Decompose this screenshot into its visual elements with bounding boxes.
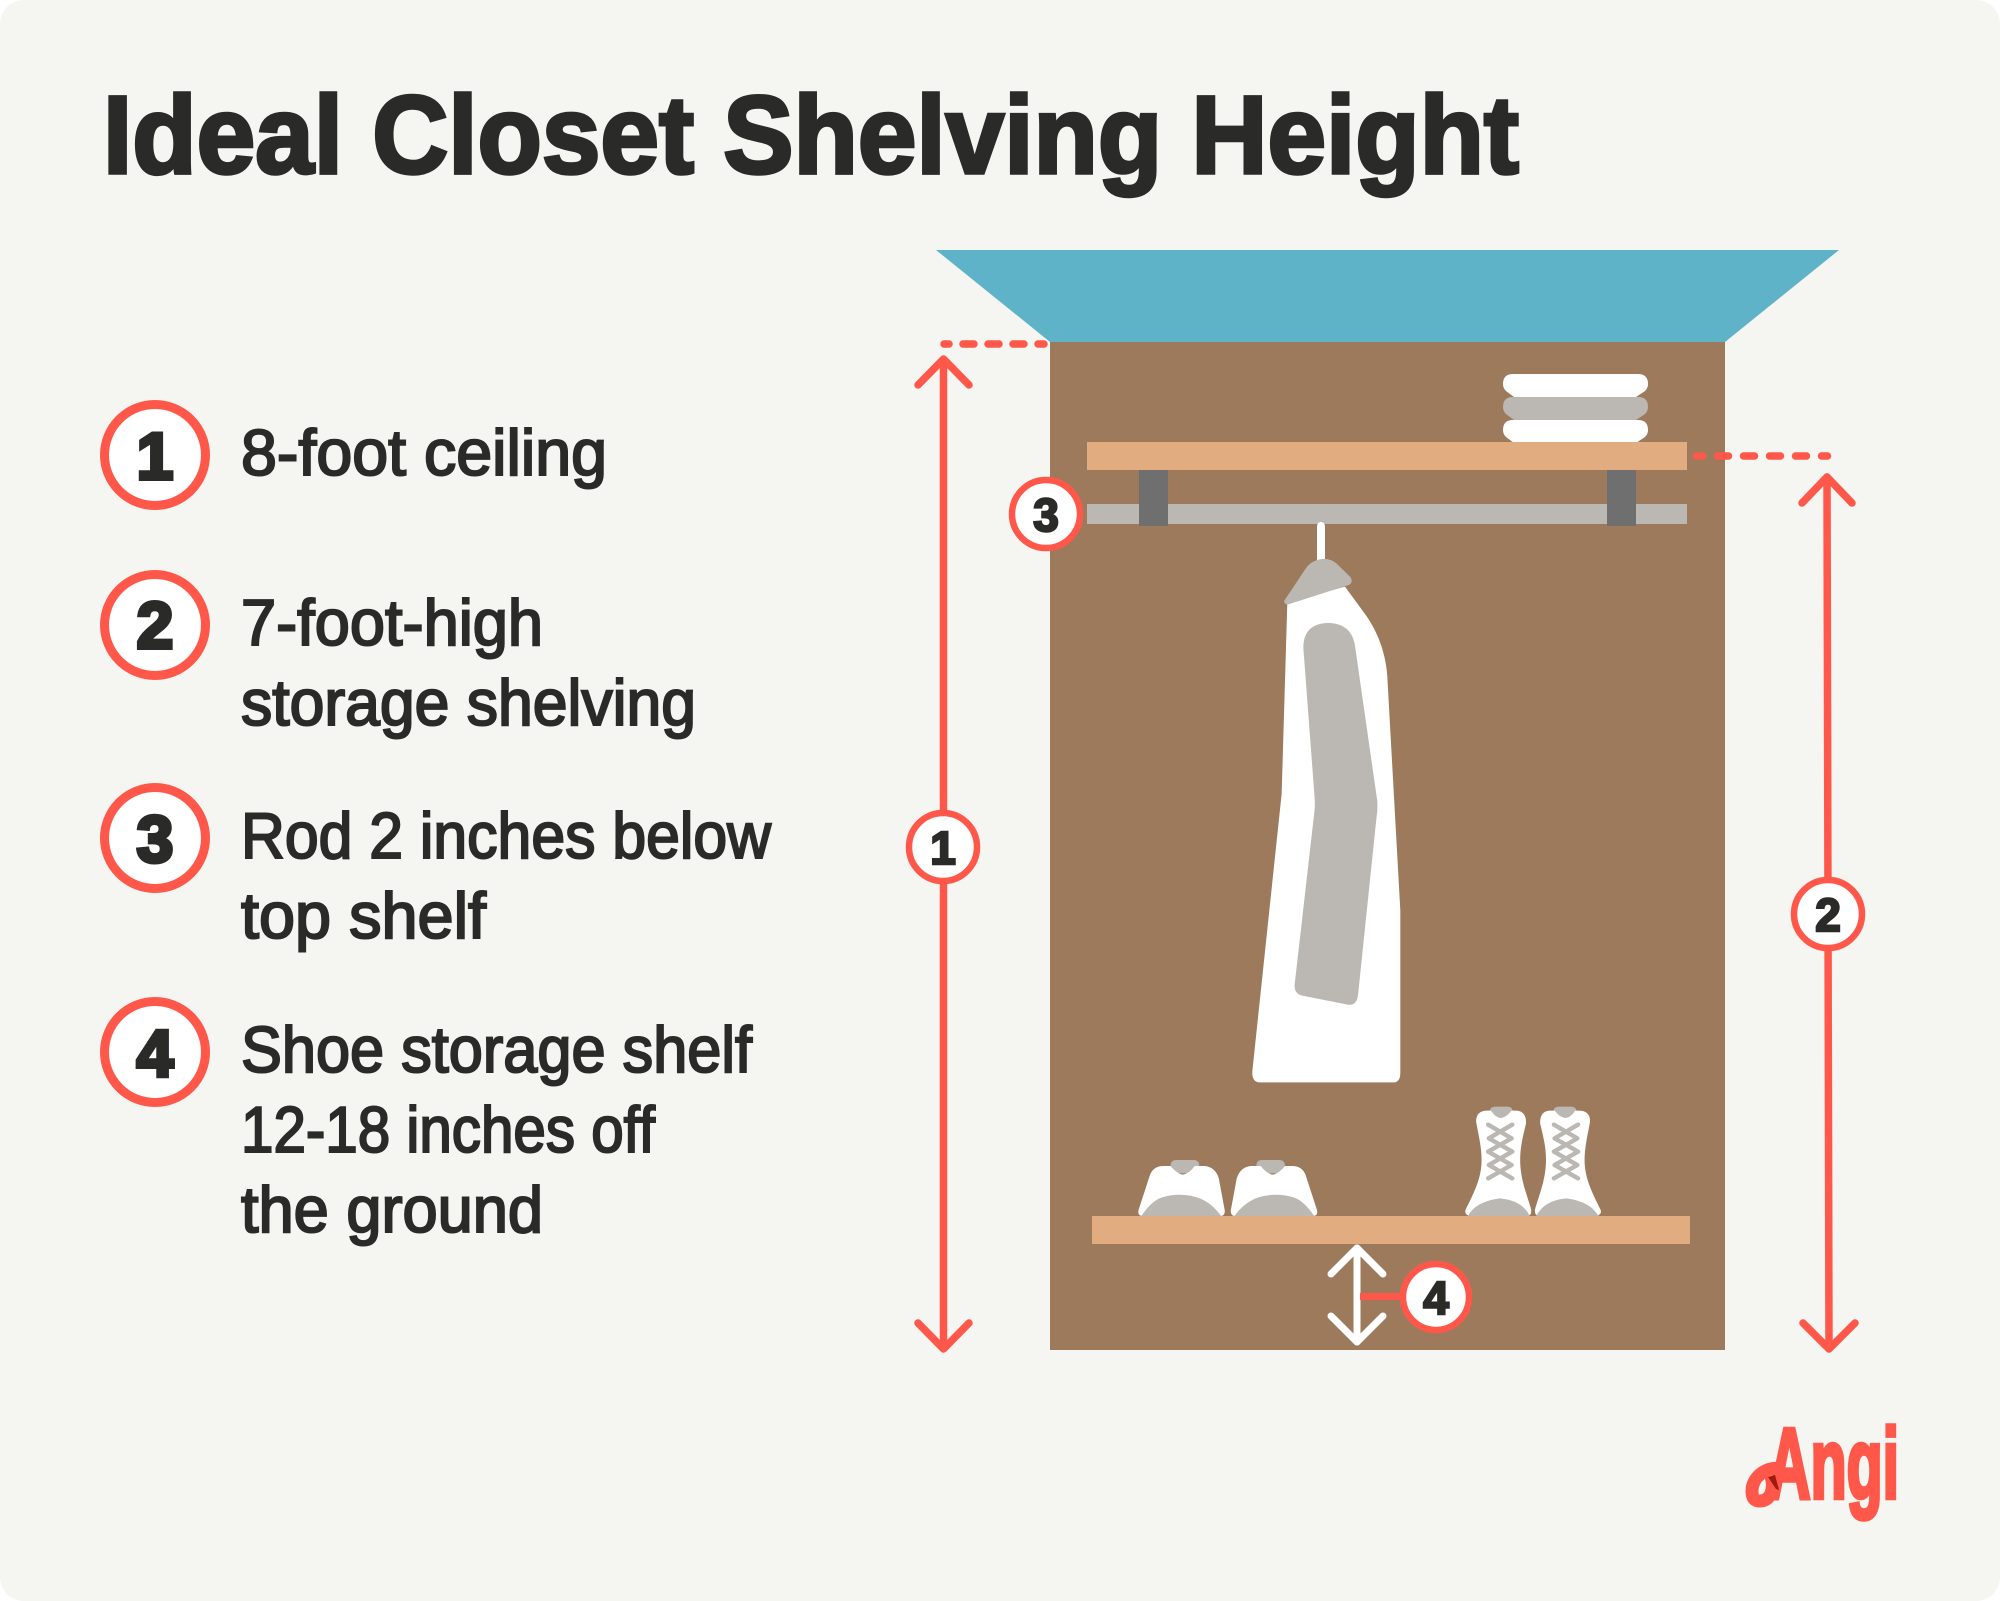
shelf dashed guide — [1696, 452, 1829, 460]
legend item 4: the ground — [241, 1173, 543, 1246]
legend item 3: 3 — [137, 802, 173, 876]
closet back wall — [1050, 342, 1725, 1350]
marker 4 — [1403, 1264, 1469, 1330]
legend list — [104, 404, 772, 1246]
legend item 2: 7-foot-high — [241, 586, 543, 659]
shoe shelf — [1092, 1216, 1690, 1244]
Angi logo: Angi — [1768, 1408, 1899, 1520]
legend item 3: top shelf — [241, 879, 487, 952]
legend item 3 — [104, 788, 772, 952]
marker 3: 3 — [1033, 489, 1059, 541]
rod bracket left — [1139, 470, 1168, 526]
rod bracket right — [1607, 470, 1636, 526]
legend item 4: Shoe storage shelf — [241, 1013, 753, 1086]
ceiling dashed guide — [944, 340, 1044, 348]
legend item 4 — [104, 1002, 753, 1246]
ceiling — [936, 250, 1839, 342]
legend item 3: Rod 2 inches below — [241, 799, 772, 872]
pair of boots — [1465, 1107, 1601, 1216]
title: Ideal Closet Shelving Height — [103, 74, 1519, 197]
marker 4: 4 — [1423, 1272, 1449, 1324]
top shelf — [1087, 442, 1687, 470]
marker 3 — [1012, 480, 1080, 548]
hanging coat — [1252, 522, 1400, 1082]
legend item 1 — [104, 404, 607, 506]
legend item 2: 2 — [137, 588, 173, 662]
Angi logo — [1752, 1408, 1899, 1520]
legend item 2: storage shelving — [241, 666, 696, 739]
folded towels — [1503, 374, 1648, 443]
ceiling height arrow — [918, 359, 969, 1349]
storage shelving height arrow — [1802, 477, 1855, 1349]
legend item 1: 8-foot ceiling — [241, 416, 607, 489]
legend item 4: 4 — [137, 1016, 174, 1090]
white double arrow under shoe shelf — [1331, 1248, 1383, 1342]
connector to marker 4 — [1360, 1293, 1404, 1300]
marker 1 — [909, 813, 977, 881]
legend item 1: 1 — [137, 419, 173, 493]
marker 2 — [1794, 880, 1862, 948]
marker 1: 1 — [930, 822, 956, 874]
legend item 2 — [104, 574, 696, 739]
closet diagram — [936, 250, 1839, 1350]
legend item 4: 12-18 inches off — [241, 1093, 656, 1166]
hanging rod — [1087, 504, 1687, 524]
pair of shoes — [1138, 1160, 1317, 1216]
marker 2: 2 — [1815, 889, 1841, 941]
